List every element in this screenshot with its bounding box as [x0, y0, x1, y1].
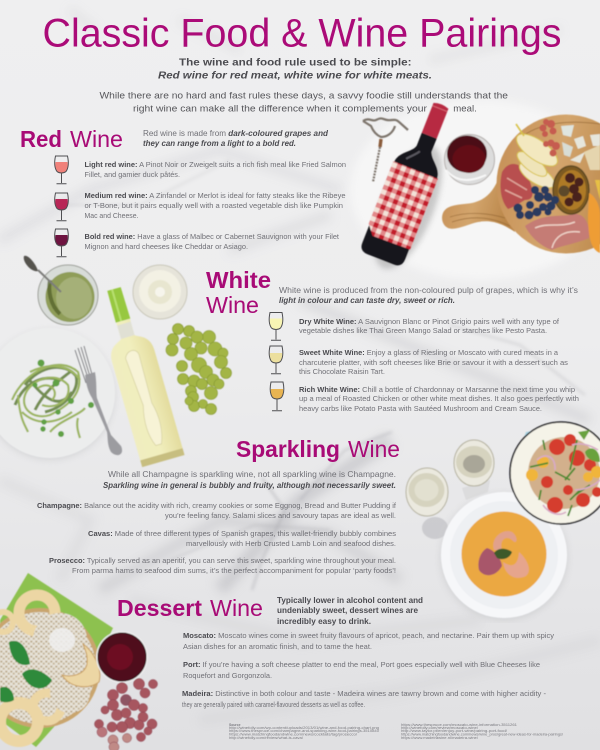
- dessert wine description: incredibly easy to drink.: [277, 617, 371, 626]
- olive bowl: [553, 166, 589, 214]
- dry white wine text: Dry White Wine: A Sauvignon Blanc or Pinot Grigio pairs well with any type of: [299, 317, 559, 326]
- rich white wine text: heavy carbs like Potato Pasta with Sautéed Mushroom and Cream Sauce.: [299, 404, 542, 413]
- red wine description: Red wine is made from dark-coloured grapes and: [143, 129, 329, 138]
- medium red wine text: [84, 191, 346, 220]
- white wine description: White wine is produced from the non-coloured pulp of grapes, which is why it’s: [279, 286, 578, 295]
- icon: bold red wine glass: [55, 229, 68, 257]
- blue cheese: [561, 125, 600, 163]
- cheese board: [442, 114, 600, 254]
- moscato text: Asian dishes for an aromatic finish, and to tame the heat.: [183, 642, 372, 651]
- icon: light red wine glass: [55, 156, 68, 184]
- melon: [588, 193, 600, 253]
- intro text block: While there are no hard and fast rules these days, a savvy foodie still understands that the: [100, 90, 508, 100]
- title: Classic Food & Wine Pairings: [42, 12, 562, 56]
- green grapes: [166, 324, 232, 414]
- sweet white wine text: charcuterie platter, with soft cheeses like Brie or savour it with a dessert such as: [299, 358, 568, 367]
- light red wine text: [84, 160, 346, 179]
- heading: sparkling wine: [236, 436, 400, 462]
- dessert red wine glass: [96, 631, 148, 683]
- light red wine text: Light red wine: A Pinot Noir or Zweigelt suits a rich fish meal like Fried Salmon: [84, 160, 346, 169]
- source list: http://winefolly.com/wp-content/uploads/2013/01/wine-and-food-pairing-chart.png: [229, 726, 379, 730]
- icon: dry white wine glass: [269, 312, 283, 340]
- source list: https://www.thespruce.com/moscato-wine-information-3511261: [401, 723, 517, 727]
- champagne text: Champagne: Balance out the acidity with rich, creamy cookies or some Eggnog, Bread and Butter Pudding if: [37, 501, 396, 510]
- bold red wine text: [84, 232, 339, 251]
- panel: dessert photo: [0, 573, 158, 750]
- port text: [183, 660, 540, 680]
- salad bowl: [510, 422, 600, 524]
- dessert plate: [0, 595, 100, 741]
- panel: red wine: [20, 126, 346, 257]
- moscato text: Moscato: Moscato wines come in sweet fruity flavours of apricot, peach, and nectarine. Pair them up with spicy: [183, 631, 554, 640]
- heading: red wine: [20, 126, 123, 152]
- sparkling wine description: While all Champagne is sparkling wine, not all sparkling wine is Champagne.: [108, 470, 396, 479]
- red wine glass: [444, 134, 494, 184]
- rich white wine text: Rich White Wine: Chill a bottle of Chardonnay or Marsanne the next time you whip: [299, 385, 575, 394]
- champagne text: [37, 501, 396, 520]
- source list: Source: [229, 723, 241, 727]
- bold red wine text: Bold red wine: Have a glass of Malbec or Cabernet Sauvignon with your Filet: [84, 232, 339, 241]
- prosecco text: [49, 556, 396, 575]
- red grapes: [94, 678, 158, 750]
- white wine description: [279, 286, 578, 305]
- white wine bottle: [93, 283, 184, 467]
- panel: dessert wine: [117, 595, 554, 709]
- source list: [229, 723, 563, 740]
- white wine glass: [133, 265, 187, 319]
- intro text block: meal.: [453, 104, 477, 114]
- dessert wine description: [277, 596, 423, 626]
- dry white wine text: [299, 317, 559, 335]
- dry white wine text: vegetable dishes like Thai Green Mango Salad or starches like Pesto Pasta.: [299, 326, 547, 335]
- heading: dessert wine: Dessert: [117, 595, 202, 621]
- light red wine text: Fillet, and gamier duck pâtés.: [84, 170, 180, 179]
- sweet white wine text: Sweet White Wine: Enjoy a glass of Riesling or Moscato with cured meats in a: [299, 348, 558, 357]
- plate with pasta: [0, 328, 115, 460]
- prosecco text: Prosecco: Typically served as an aperitif, you can serve this sweet, sparkling wine throughout your meal.: [49, 556, 396, 565]
- source list: http://winefolly.com/review/what-is-cava/: [229, 736, 303, 740]
- madeira text: they are generally paired with caramel-flavoured desserts as well as coffee.: [182, 700, 365, 709]
- prosecco text: From parma hams to seafood dim sums, it’s the perfect accompaniment for popular ‘party foods’!: [72, 566, 396, 575]
- panel: sparkling photo: [406, 422, 600, 621]
- mint leaves: [0, 641, 52, 702]
- source list: https://www.matchingfoodandwine.com/news/wine_pros/great-new-ideas-for-madeira-pairings/: [401, 732, 563, 736]
- intro text block: right wine can make all the difference when it complements your: [133, 104, 427, 114]
- shrimp: [493, 531, 517, 550]
- fork: [75, 346, 122, 455]
- red chunks: [540, 119, 560, 156]
- blue grapes: [514, 186, 559, 220]
- pesto bowl: [24, 256, 98, 325]
- source list: https://www.madeirawine.nl/madeira-wine/: [401, 736, 478, 740]
- heading: dessert wine: [117, 595, 263, 621]
- icon: rich white wine glass: [270, 382, 284, 411]
- medium red wine text: Mac and Cheese.: [84, 211, 138, 220]
- source list: http://winefolly.com/review/moscato-wine/: [401, 726, 478, 730]
- medium red wine text: Medium red wine: A Zinfandel or Merlot is ideal for fatty steaks like the Ribeye: [84, 191, 346, 200]
- cavas text: Cavas: Made of three different types of Spanish grapes, this wallet-friendly bubbly combines: [88, 529, 396, 538]
- heading: red wine: Red: [20, 126, 62, 152]
- white wine description: light in colour and can taste dry, sweet or rich.: [279, 296, 455, 305]
- soup plate: [440, 492, 568, 621]
- champagne glasses: [406, 440, 494, 539]
- cavas text: marvellously with Herb Crusted Lamb Loin and seafood dishes.: [186, 539, 396, 548]
- source list: https://www.matchingfoodandwine.com/news/cocktails/tag/prosecco/: [229, 732, 357, 736]
- cured meat: [500, 164, 533, 209]
- red wine description: they can range from a light to a bold red.: [143, 139, 296, 148]
- red wine bottle: [356, 96, 471, 278]
- icon: medium red wine glass: [55, 193, 68, 221]
- panel: white wine: [206, 267, 579, 413]
- rich white wine text: [299, 385, 579, 413]
- sweet white wine text: this Chocolate Raisin Tart.: [299, 367, 385, 376]
- medium red wine text: or T-Bone, but it pairs equally well with a roasted vegetable dish like Pumpkin: [84, 201, 343, 210]
- icon: corkscrew: [363, 118, 408, 182]
- intro text block: [100, 57, 508, 114]
- pear slices: [512, 124, 562, 193]
- dessert wine description: undeniably sweet, dessert wines are: [277, 606, 419, 615]
- madeira text: Madeira: Distinctive in both colour and taste - Madeira wines are tawny brown and come with higher acidity -: [182, 689, 547, 698]
- white haze behind the red wine photo: [350, 100, 600, 280]
- madeira text: [182, 689, 547, 709]
- panel: white wine photo: [0, 256, 232, 467]
- heading: white wine: Wine: [206, 292, 259, 318]
- sparkling wine description: [103, 470, 396, 490]
- sweet white wine text: [299, 348, 568, 376]
- port text: Roquefort and Gorgonzola.: [183, 671, 272, 680]
- heading: sparkling wine: Sparkling: [236, 436, 340, 462]
- heading: white wine: [206, 267, 271, 318]
- icon: sweet white wine glass: [269, 346, 283, 374]
- bottle label: gingham: [365, 161, 438, 250]
- moscato text: [183, 631, 554, 651]
- heading: white wine: White: [206, 267, 271, 293]
- champagne text: you’re feeling fancy. Salami slices and savoury tapas are ideal as well.: [165, 511, 396, 520]
- rich white wine text: up a meal of Roasted Chicken or other white meat dishes. It also goes perfectly with: [299, 394, 579, 403]
- source list: http://www.taylor.pt/en/enjoy-port-wine/pairing-port-food/: [401, 729, 507, 733]
- heading: dessert wine: Wine: [210, 595, 263, 621]
- red wine description: [143, 129, 329, 148]
- panel: sparkling wine: [37, 436, 400, 575]
- cavas text: [88, 529, 396, 548]
- intro text block: Red wine for red meat, white wine for white meats.: [158, 70, 432, 81]
- panel: red wine photo: [356, 96, 600, 278]
- port text: Port: If you’re having a soft cheese platter to end the meal, Port goes especially well with Blue Cheeses like: [183, 660, 540, 669]
- bold red wine text: Mignon and hard cheeses like Cheddar or Asiago.: [84, 242, 248, 251]
- source list: https://www.thespruce.com/champagne-and-sparkling-wine-food-pairings-3510840: [229, 729, 379, 733]
- sparkling wine description: Sparkling wine in general is bubbly and fruity, although not necessarily sweet.: [103, 481, 396, 490]
- green napkin: [0, 573, 113, 747]
- heading: red wine: Wine: [70, 126, 123, 152]
- dessert wine description: Typically lower in alcohol content and: [277, 596, 423, 605]
- intro text block: The wine and food rule used to be simple:: [179, 57, 412, 68]
- heading: sparkling wine: Wine: [348, 436, 400, 462]
